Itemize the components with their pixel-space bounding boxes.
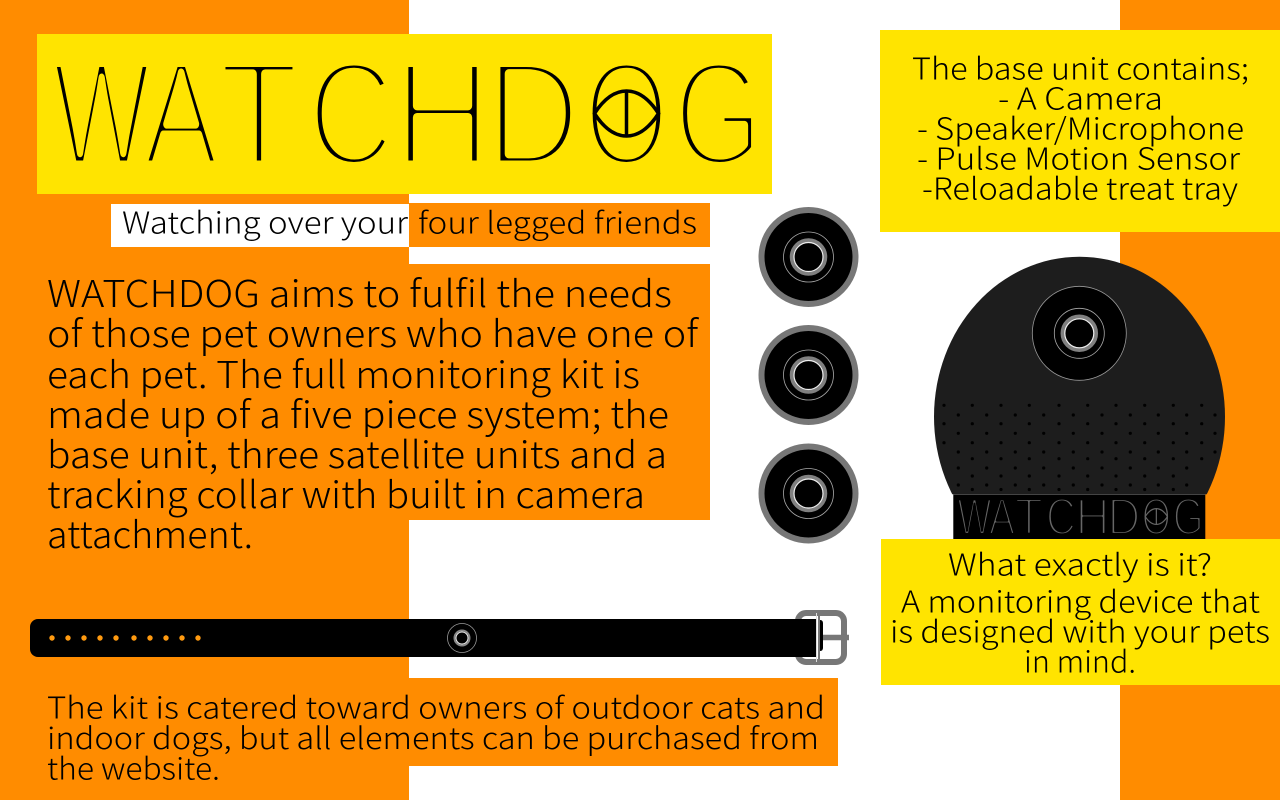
base unit contents panel: -Reloadable treat tray [922,164,1238,208]
base logo plate: W [957,487,991,546]
title: WATCHDOG: O [584,30,669,197]
closing note: The kit is catered toward owners of outdoor cats and [47,684,825,728]
base logo plate: O [1142,487,1171,546]
what is it panel: What exactly is it? [948,540,1212,584]
base unit contents panel: The base unit contains; [912,44,1249,88]
base logo plate: A [989,487,1015,546]
base logo plate: D [1108,487,1140,546]
closing note [47,678,838,788]
base unit contents panel [880,30,1280,232]
base unit contents panel: - Pulse Motion Sensor [917,134,1240,178]
base logo plate: C [1046,487,1076,546]
base unit contents panel: - A Camera [998,74,1163,118]
closing note: the website. [47,744,220,788]
what is it panel: A monitoring device that [901,578,1260,622]
icon: logo eye [594,91,658,136]
title: WATCHDOG: C [308,30,394,197]
title: WATCHDOG: G [674,30,763,197]
base camera lens [1032,286,1126,380]
collar [30,613,849,662]
background: right orange band [1120,0,1280,800]
what is it panel: in mind. [1024,638,1136,682]
intro paragraph: tracking collar with built in camera [47,465,645,519]
satellite unit 2 [762,328,856,422]
base logo plate: T [1015,487,1043,546]
collar buckle [798,613,849,662]
tagline: Watching over your [122,198,408,242]
closing note: indoor dogs, but all elements can be purchased from [47,714,819,758]
tagline: four legged friends [418,198,697,242]
title panel [37,30,772,197]
title: WATCHDOG: D [486,30,580,197]
base logo plate [953,487,1205,546]
intro paragraph: attachment. [47,505,253,559]
background: left orange band [0,0,409,800]
intro paragraph: made up of a five piece system; the [47,385,669,439]
intro paragraph: WATCHDOG aims to fulfil the needs [47,264,672,318]
title: WATCHDOG: A [143,30,219,197]
collar camera [448,624,476,652]
base unit contents panel: - Speaker/Microphone [917,104,1244,148]
tagline [111,198,710,247]
title: WATCHDOG: H [393,30,492,197]
what is it panel: is designed with your pets [890,608,1270,652]
base logo plate: G [1173,487,1204,546]
collar holes [49,635,201,641]
title: WATCHDOG: W [52,30,151,197]
speaker dots [944,405,1215,490]
base unit device [934,256,1226,546]
what is it panel [881,539,1280,685]
intro paragraph: base unit, three satellite units and a [47,425,667,479]
intro paragraph [47,264,710,559]
title: WATCHDOG: T [218,30,300,197]
satellite unit 3 [762,446,856,540]
intro paragraph: each pet. The full monitoring kit is [47,345,640,399]
base logo plate: H [1075,487,1110,546]
satellite unit 1 [762,210,856,304]
intro paragraph: of those pet owners who have one of [47,304,700,358]
